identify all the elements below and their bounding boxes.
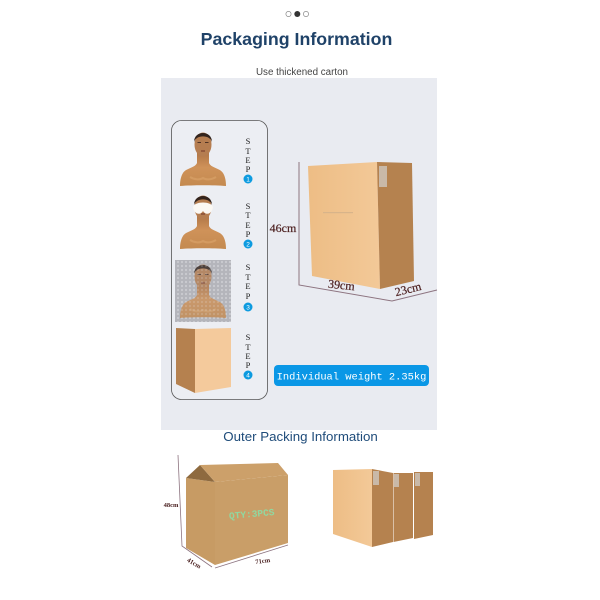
step 3: mannequin in bubble wrap: T	[245, 272, 251, 282]
step 1: bare mannequin	[180, 132, 252, 186]
carton with dimensions: 46cm	[270, 221, 297, 235]
step 3: mannequin in bubble wrap: P	[246, 291, 251, 301]
title: Packaging Information	[201, 29, 392, 49]
outer carton with dimensions: 41cm	[186, 557, 202, 571]
outer carton with dimensions: 71cm	[255, 557, 271, 566]
step 1: bare mannequin: S	[246, 136, 251, 146]
carton with dimensions: 39cm	[327, 277, 356, 293]
outer packing heading: Outer Packing Information	[223, 429, 378, 444]
subtitle: Use thickened carton	[256, 67, 348, 78]
step 2: mannequin with eye foam: 2	[246, 242, 250, 248]
step 3: mannequin in bubble wrap: E	[245, 281, 251, 291]
carton with dimensions: 23cm	[393, 279, 423, 299]
step 4: boxed carton	[176, 328, 252, 393]
panel: packaging steps and carton	[161, 78, 437, 430]
step 3: mannequin in bubble wrap: 3	[246, 304, 250, 312]
weight badge: Individual weight 2.35kg	[277, 372, 426, 384]
step 2: mannequin with eye foam: T	[245, 210, 251, 220]
step 1: bare mannequin: P	[246, 164, 251, 174]
step 2: mannequin with eye foam: S	[246, 201, 251, 211]
step 4: boxed carton: P	[246, 360, 251, 370]
weight badge	[274, 365, 429, 386]
step 1: bare mannequin: E	[245, 155, 251, 165]
steps frame	[172, 120, 268, 400]
three cartons	[333, 469, 433, 547]
step 2: mannequin with eye foam	[180, 196, 252, 249]
step 2: mannequin with eye foam: E	[245, 220, 251, 230]
step 3: mannequin in bubble wrap: S	[246, 262, 251, 272]
step 1: bare mannequin: T	[245, 146, 251, 156]
outer carton with dimensions: 48cm	[164, 502, 179, 509]
carousel dots	[286, 11, 309, 17]
outer carton with dimensions: QTY:3PCS	[229, 507, 275, 522]
step 4: boxed carton: 4	[246, 372, 250, 380]
step 4: boxed carton: T	[245, 342, 251, 352]
outer carton with dimensions	[164, 455, 288, 571]
step 3: mannequin in bubble wrap	[175, 260, 252, 322]
step 4: boxed carton: E	[245, 351, 251, 361]
step 1: bare mannequin: 1	[246, 176, 250, 184]
carton with dimensions	[270, 162, 437, 301]
step 2: mannequin with eye foam: P	[246, 229, 251, 239]
step 4: boxed carton: S	[246, 332, 251, 342]
